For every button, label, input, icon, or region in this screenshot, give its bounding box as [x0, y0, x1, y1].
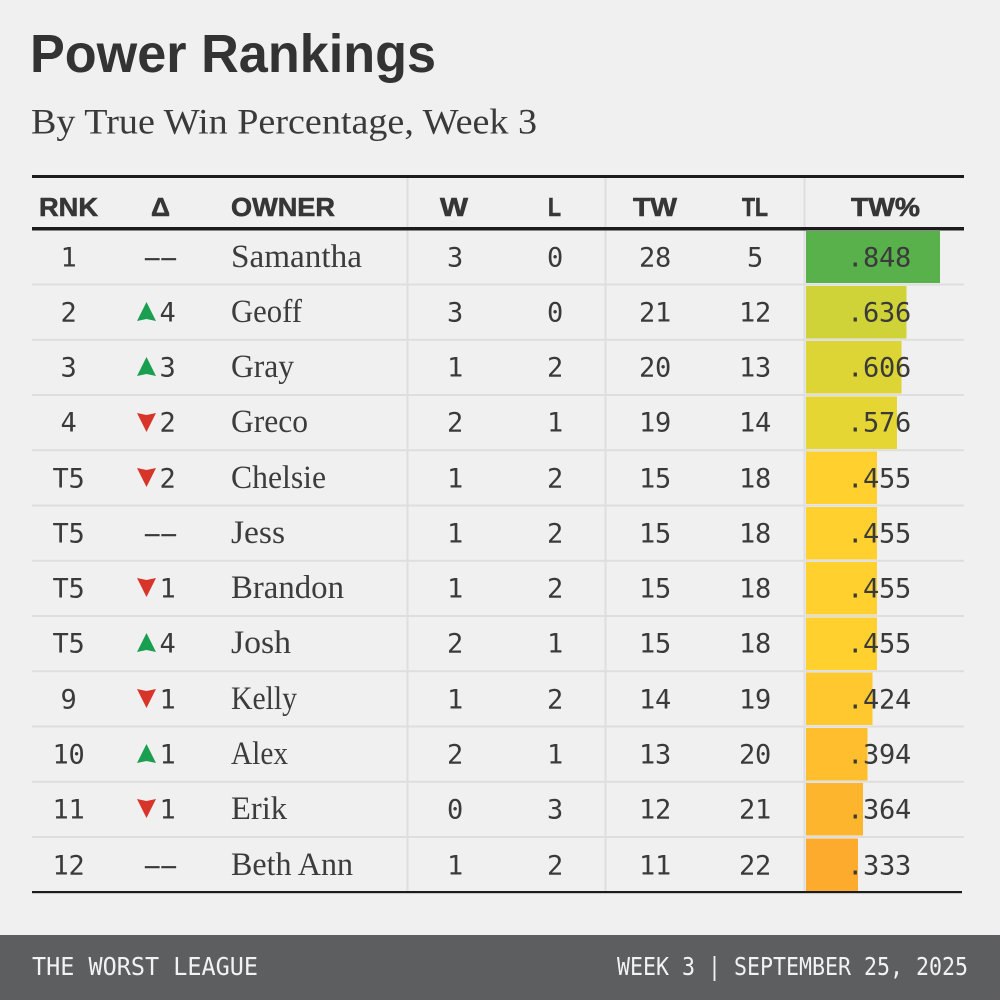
column heading: TW: TW — [633, 192, 678, 222]
row 2: Geoff — [61, 294, 911, 330]
row 1: Samantha — [61, 239, 911, 275]
bar chart: TW% bars — [806, 231, 940, 892]
row 1: Samantha: 3 — [447, 243, 463, 274]
row 12: Beth Ann: 22 — [739, 851, 771, 882]
row 5: Chelsie: 15 — [639, 464, 671, 495]
row 5: Chelsie: Chelsie — [231, 460, 326, 496]
row 2: Geoff: .636 — [847, 298, 911, 329]
row 11: Erik: 1 — [160, 795, 175, 826]
row 8: Josh — [53, 625, 911, 661]
row 10: Alex — [53, 736, 911, 772]
column heading: TW%: TW% — [851, 192, 920, 222]
column heading: OWNER: OWNER — [231, 192, 335, 222]
row 6: Jess: 2 — [547, 519, 563, 550]
row 7: Brandon: 18 — [739, 574, 771, 605]
row 10: Alex: .394 — [847, 740, 911, 771]
row 4: Greco: Greco — [231, 404, 308, 440]
row 2: Geoff: 2 — [61, 298, 76, 329]
row 6: Jess: 15 — [639, 519, 671, 550]
row 1: Samantha: –– — [145, 244, 178, 272]
row 2: Geoff: 4 — [160, 298, 175, 329]
row 5: Chelsie — [53, 460, 911, 496]
row 6: Jess: .455 — [847, 519, 911, 550]
row 7: Brandon: T5 — [53, 574, 84, 605]
row 4: Greco: 4 — [61, 408, 76, 439]
row 2: Geoff: Geoff — [231, 294, 302, 330]
row 12: Beth Ann: 11 — [639, 851, 671, 882]
row 9: Kelly: 9 — [61, 685, 76, 716]
row 3: Gray: 2 — [547, 353, 563, 384]
row 11: Erik: 11 — [53, 795, 84, 826]
row 3: Gray: 3 — [61, 353, 76, 384]
row 9: Kelly — [61, 681, 911, 717]
row 3: Gray: .606 — [847, 353, 911, 384]
row 12: Beth Ann: 12 — [53, 851, 84, 882]
row 7: Brandon: Brandon — [231, 570, 344, 606]
row 3: Gray: 13 — [739, 353, 771, 384]
column heading: W: W — [440, 192, 469, 222]
row 9: Kelly: .424 — [847, 685, 911, 716]
row 5: Chelsie: 1 — [447, 464, 463, 495]
row 8: Josh: Josh — [231, 625, 292, 661]
row 4: Greco — [61, 404, 911, 440]
row 9: Kelly: 14 — [639, 685, 671, 716]
row 10: Alex: 13 — [639, 740, 671, 771]
row 1: Samantha: 0 — [547, 243, 563, 274]
row 12: Beth Ann: Beth Ann — [231, 847, 353, 883]
row 4: Greco: 2 — [447, 408, 463, 439]
row 11: Erik: 12 — [639, 795, 671, 826]
row 10: Alex: 2 — [447, 740, 463, 771]
title: Power Rankings — [30, 24, 436, 84]
row 2: Geoff: 3 — [447, 298, 463, 329]
row 12: Beth Ann: 2 — [547, 851, 563, 882]
row 5: Chelsie: 2 — [547, 464, 563, 495]
row 6: Jess — [53, 515, 911, 551]
row 11: Erik: Erik — [231, 791, 287, 827]
row 12: Beth Ann — [53, 847, 911, 883]
row 8: Josh: 4 — [160, 629, 175, 660]
row 11: Erik: 0 — [447, 795, 463, 826]
row 8: Josh: .455 — [847, 629, 911, 660]
row 10: Alex: 1 — [160, 740, 175, 771]
row 3: Gray: 1 — [447, 353, 463, 384]
subtitle: By True Win Percentage, Week 3 — [31, 102, 537, 142]
row 4: Greco: 2 — [160, 408, 175, 439]
row 10: Alex: 10 — [53, 740, 84, 771]
row 10: Alex: 20 — [739, 740, 771, 771]
footer bar — [0, 935, 1000, 1000]
row 3: Gray: 20 — [639, 353, 671, 384]
row 6: Jess: 1 — [447, 519, 463, 550]
row 12: Beth Ann: 1 — [447, 851, 463, 882]
row 10: Alex: Alex — [231, 736, 288, 772]
column heading: RNK: RNK — [39, 192, 98, 222]
row 7: Brandon: 1 — [447, 574, 463, 605]
row 9: Kelly: 2 — [547, 685, 563, 716]
row 9: Kelly: 19 — [739, 685, 771, 716]
row 1: Samantha: 1 — [61, 243, 76, 274]
row 7: Brandon: 15 — [639, 574, 671, 605]
column heading: L: L — [548, 192, 561, 222]
table header row — [39, 192, 920, 222]
row 6: Jess: T5 — [53, 519, 84, 550]
row 3: Gray: Gray — [231, 349, 294, 385]
row 4: Greco: .576 — [847, 408, 911, 439]
row 6: Jess: 18 — [739, 519, 771, 550]
row 3: Gray — [61, 349, 911, 385]
row 8: Josh: 2 — [447, 629, 463, 660]
row 7: Brandon: 1 — [160, 574, 175, 605]
row 9: Kelly: 1 — [447, 685, 463, 716]
row 1: Samantha: 28 — [639, 243, 671, 274]
column heading: change: Δ — [151, 192, 170, 222]
row 8: Josh: 15 — [639, 629, 671, 660]
row 11: Erik: 21 — [739, 795, 771, 826]
row 10: Alex: 1 — [547, 740, 563, 771]
row 6: Jess: –– — [145, 520, 178, 548]
row 1: Samantha: .848 — [847, 243, 911, 274]
row 5: Chelsie: 18 — [739, 464, 771, 495]
row 7: Brandon: 2 — [547, 574, 563, 605]
row 1: Samantha: 5 — [747, 243, 763, 274]
row 11: Erik — [53, 791, 911, 827]
footer: league name: THE WORST LEAGUE — [32, 952, 258, 981]
row 8: Josh: 1 — [547, 629, 563, 660]
row 12: Beth Ann: .333 — [847, 851, 911, 882]
row 12: Beth Ann: –– — [145, 852, 178, 880]
row 7: Brandon: .455 — [847, 574, 911, 605]
row 4: Greco: 14 — [739, 408, 771, 439]
row 9: Kelly: Kelly — [231, 681, 297, 717]
row 7: Brandon — [53, 570, 911, 606]
column heading: TL: TL — [742, 192, 768, 222]
row 11: Erik: .364 — [847, 795, 911, 826]
row 2: Geoff: 21 — [639, 298, 671, 329]
row 2: Geoff: 12 — [739, 298, 771, 329]
row 3: Gray: 3 — [160, 353, 175, 384]
row 5: Chelsie: .455 — [847, 464, 911, 495]
row 5: Chelsie: T5 — [53, 464, 84, 495]
row 9: Kelly: 1 — [160, 685, 175, 716]
row 4: Greco: 1 — [547, 408, 563, 439]
row 1: Samantha: Samantha — [231, 239, 362, 275]
row 11: Erik: 3 — [547, 795, 563, 826]
row 5: Chelsie: 2 — [160, 464, 175, 495]
row 8: Josh: T5 — [53, 629, 84, 660]
row 4: Greco: 19 — [639, 408, 671, 439]
row 8: Josh: 18 — [739, 629, 771, 660]
row 6: Jess: Jess — [231, 515, 285, 551]
row 2: Geoff: 0 — [547, 298, 563, 329]
